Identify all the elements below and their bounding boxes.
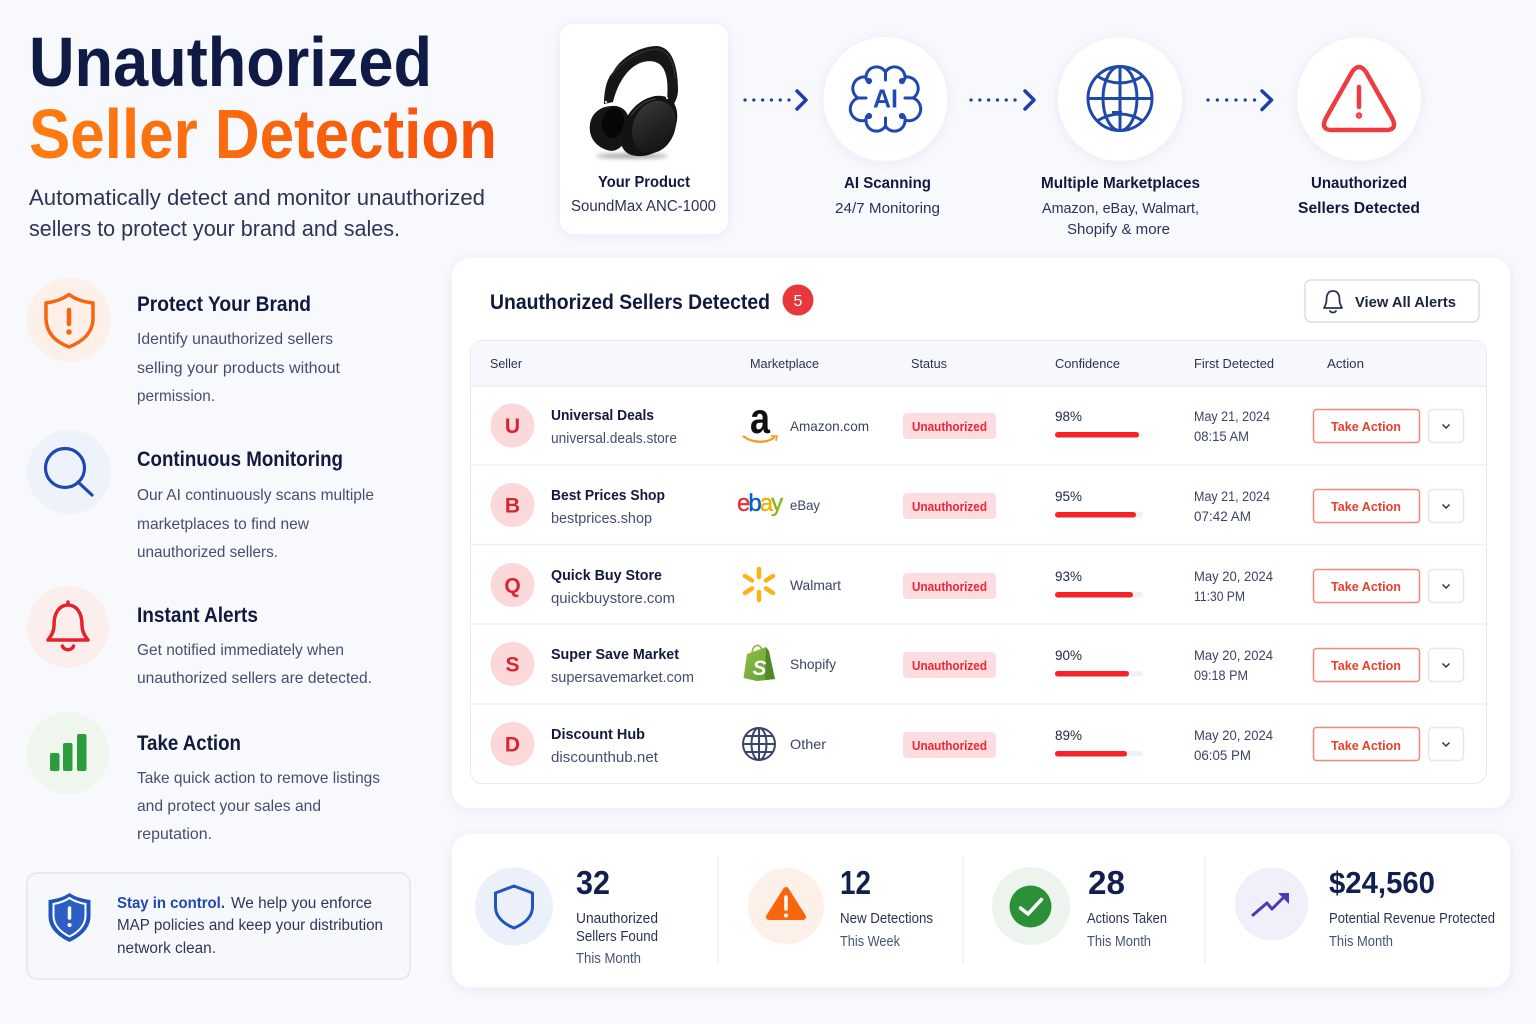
table frame and header: First Detected xyxy=(1194,356,1274,371)
stat: new detections: New Detections xyxy=(840,911,933,927)
step: multiple marketplaces: Multiple Marketplaces xyxy=(1041,175,1200,192)
stat: revenue protected xyxy=(1235,865,1495,950)
logo: other globe xyxy=(743,728,775,760)
button: view all alerts xyxy=(1305,280,1479,322)
row: Universal Deals: 98% xyxy=(1055,409,1082,424)
feature: take action: Take Action xyxy=(137,732,241,755)
row: Quick Buy Store: Take Action xyxy=(1331,579,1401,594)
row: Super Save Market: Take Action xyxy=(1331,658,1401,673)
row: Best Prices Shop: May 21, 2024 xyxy=(1194,489,1270,504)
row: Super Save Market xyxy=(490,642,1464,686)
row: Universal Deals: universal.deals.store xyxy=(551,430,677,447)
row: Discount Hub: Other xyxy=(790,736,826,752)
logo: Shopify xyxy=(744,645,775,681)
title: Seller Detection xyxy=(29,95,497,173)
arrow: product to AI scanning xyxy=(745,91,806,109)
row: Universal Deals xyxy=(490,395,1464,448)
row: Universal Deals: Unauthorized xyxy=(912,419,987,434)
row: Super Save Market: 09:18 PM xyxy=(1194,668,1248,683)
panel: product card: SoundMax ANC-1000 xyxy=(571,198,716,215)
callout: stay in control: network clean. xyxy=(117,940,216,957)
row: Quick Buy Store xyxy=(490,563,1464,607)
step: multiple marketplaces xyxy=(1041,37,1200,238)
step: AI scanning: 24/7 Monitoring xyxy=(835,200,940,217)
stat: revenue protected: This Month xyxy=(1329,934,1393,950)
table frame and header: Status xyxy=(911,356,947,371)
icon: red alert triangle xyxy=(1324,67,1394,130)
icon: green bars xyxy=(50,734,86,771)
step: sellers detected: Sellers Detected xyxy=(1298,200,1420,217)
icon: AI brain xyxy=(850,67,921,131)
title xyxy=(29,23,497,173)
table frame and header: Action xyxy=(1327,356,1364,371)
feature: take action: Take quick action to remove listings xyxy=(137,770,380,787)
feature: continuous monitoring: unauthorized sellers. xyxy=(137,544,278,561)
row: Quick Buy Store: quickbuystore.com xyxy=(551,590,675,607)
row: Discount Hub: D xyxy=(505,734,520,756)
row: Discount Hub: 06:05 PM xyxy=(1194,748,1251,763)
stat: actions taken: Actions Taken xyxy=(1087,911,1167,927)
stat: sellers found: This Month xyxy=(576,951,641,967)
row: Discount Hub: May 20, 2024 xyxy=(1194,728,1273,743)
stat: actions taken: This Month xyxy=(1087,934,1151,950)
callout: stay in control xyxy=(27,873,410,979)
row: Best Prices Shop: B xyxy=(505,494,520,518)
feature: protect your brand: Protect Your Brand xyxy=(137,293,311,316)
row: Super Save Market: Super Save Market xyxy=(551,646,679,663)
row: Universal Deals: May 21, 2024 xyxy=(1194,409,1270,424)
subtitle: Automatically detect and monitor unauthorized xyxy=(29,185,485,210)
row: Super Save Market: May 20, 2024 xyxy=(1194,648,1273,663)
stat: sellers found: 32 xyxy=(576,864,610,901)
panel: product card: Your Product xyxy=(598,174,691,191)
icon: orange shield xyxy=(46,294,93,347)
row: Quick Buy Store: 11:30 PM xyxy=(1194,589,1245,604)
row: Discount Hub: discounthub.net xyxy=(551,749,659,766)
arrow: marketplaces to detected xyxy=(1208,91,1272,110)
stat: new detections: This Week xyxy=(840,934,901,950)
row: Universal Deals: Amazon.com xyxy=(790,418,869,434)
row: Super Save Market: Shopify xyxy=(790,656,836,672)
row: Best Prices Shop: Take Action xyxy=(1331,499,1401,514)
feature: protect your brand xyxy=(27,278,341,405)
title: Unauthorized xyxy=(29,23,432,101)
row: Quick Buy Store: 93% xyxy=(1055,569,1082,584)
row: Universal Deals: 08:15 AM xyxy=(1194,429,1249,444)
icon: magnifier xyxy=(46,448,92,495)
button: view all alerts: View All Alerts xyxy=(1355,294,1456,311)
row: Best Prices Shop: 07:42 AM xyxy=(1194,509,1251,524)
callout: stay in control: Stay in control. xyxy=(117,895,225,912)
panel: product card xyxy=(560,24,728,234)
step: multiple marketplaces: Amazon, eBay, Walmart, xyxy=(1042,200,1199,217)
panel: sellers table xyxy=(452,258,1510,808)
row: Super Save Market: Unauthorized xyxy=(912,658,987,673)
row: Super Save Market: supersavemarket.com xyxy=(551,669,694,686)
row: Best Prices Shop: Best Prices Shop xyxy=(551,487,665,504)
row: Quick Buy Store: Unauthorized xyxy=(912,579,987,594)
arrow: AI scanning to marketplaces xyxy=(971,91,1034,109)
table frame and header: Confidence xyxy=(1055,356,1120,371)
feature: protect your brand: permission. xyxy=(137,388,215,405)
stat: revenue protected: Potential Revenue Protected xyxy=(1329,911,1495,927)
feature: instant alerts: Get notified immediately when xyxy=(137,642,344,659)
stat: sellers found xyxy=(475,864,658,967)
row: Discount Hub xyxy=(490,722,1464,766)
row: Discount Hub: Unauthorized xyxy=(912,738,987,753)
icon: blue shield xyxy=(48,893,90,942)
logo: Walmart xyxy=(745,569,773,600)
row: Best Prices Shop: Unauthorized xyxy=(912,499,987,514)
step: multiple marketplaces: Shopify & more xyxy=(1067,221,1170,238)
row: Quick Buy Store: Q xyxy=(504,574,521,598)
row: Discount Hub: 89% xyxy=(1055,728,1082,743)
row: Quick Buy Store: May 20, 2024 xyxy=(1194,569,1273,584)
feature: continuous monitoring: marketplaces to find new xyxy=(137,516,309,533)
row: Universal Deals: Take Action xyxy=(1331,419,1401,434)
row: Universal Deals: U xyxy=(505,415,520,438)
feature: instant alerts: unauthorized sellers are detected. xyxy=(137,670,372,687)
table frame and header: Seller xyxy=(490,356,523,371)
icon: globe xyxy=(1088,66,1152,130)
row: Best Prices Shop: 95% xyxy=(1055,489,1082,504)
feature: protect your brand: selling your products without xyxy=(137,360,341,377)
feature: instant alerts: Instant Alerts xyxy=(137,604,258,627)
feature: instant alerts xyxy=(27,586,372,687)
step: AI scanning: AI Scanning xyxy=(844,175,931,192)
stat: actions taken: 28 xyxy=(1088,864,1125,901)
callout: stay in control: We help you enforce xyxy=(231,895,372,912)
step: AI scanning xyxy=(824,37,948,217)
icon: AI brain: AI xyxy=(873,84,898,114)
logo: Shopify: S xyxy=(752,657,767,680)
panel: summary stats xyxy=(452,834,1510,987)
subtitle xyxy=(29,185,485,241)
feature: take action: reputation. xyxy=(137,826,212,843)
row: Best Prices Shop: bestprices.shop xyxy=(551,510,652,527)
stat: sellers found: Sellers Found xyxy=(576,929,658,945)
step: sellers detected xyxy=(1297,37,1421,217)
row: Discount Hub: Take Action xyxy=(1331,738,1401,753)
feature: take action: and protect your sales and xyxy=(137,798,321,815)
heading: table title: Unauthorized Sellers Detected xyxy=(490,291,770,314)
icon: red bell xyxy=(48,602,88,650)
step: sellers detected: Unauthorized xyxy=(1311,175,1407,192)
badge: count xyxy=(782,284,814,316)
badge: count: 5 xyxy=(794,293,803,310)
stat: new detections: 12 xyxy=(840,864,871,901)
row: Universal Deals: Universal Deals xyxy=(551,407,654,424)
logo: eBay: ebay xyxy=(737,490,783,517)
feature: continuous monitoring xyxy=(27,430,374,561)
table frame and header: Marketplace xyxy=(750,356,819,371)
logo: Amazon: a xyxy=(750,395,771,443)
row: Quick Buy Store: Walmart xyxy=(790,577,841,593)
row: Best Prices Shop xyxy=(490,483,1464,527)
feature: protect your brand: Identify unauthorized sellers xyxy=(137,331,333,348)
stat: sellers found: Unauthorized xyxy=(576,911,658,927)
feature: continuous monitoring: Continuous Monitoring xyxy=(137,448,343,471)
row: Best Prices Shop: eBay xyxy=(790,497,820,513)
feature: continuous monitoring: Our AI continuously scans multiple xyxy=(137,487,374,504)
stat: revenue protected: $24,560 xyxy=(1329,865,1435,900)
row: Super Save Market: 90% xyxy=(1055,648,1082,663)
stat: new detections xyxy=(748,864,933,950)
row: Quick Buy Store: Quick Buy Store xyxy=(551,567,662,584)
row: Discount Hub: Discount Hub xyxy=(551,726,645,743)
feature: take action xyxy=(27,712,380,843)
row: Super Save Market: S xyxy=(505,654,520,676)
callout: stay in control: MAP policies and keep your distribution xyxy=(117,917,383,934)
subtitle: sellers to protect your brand and sales. xyxy=(29,216,400,241)
icon: headphones xyxy=(590,46,684,160)
stat: actions taken xyxy=(992,864,1167,950)
table frame and header xyxy=(470,340,1486,784)
